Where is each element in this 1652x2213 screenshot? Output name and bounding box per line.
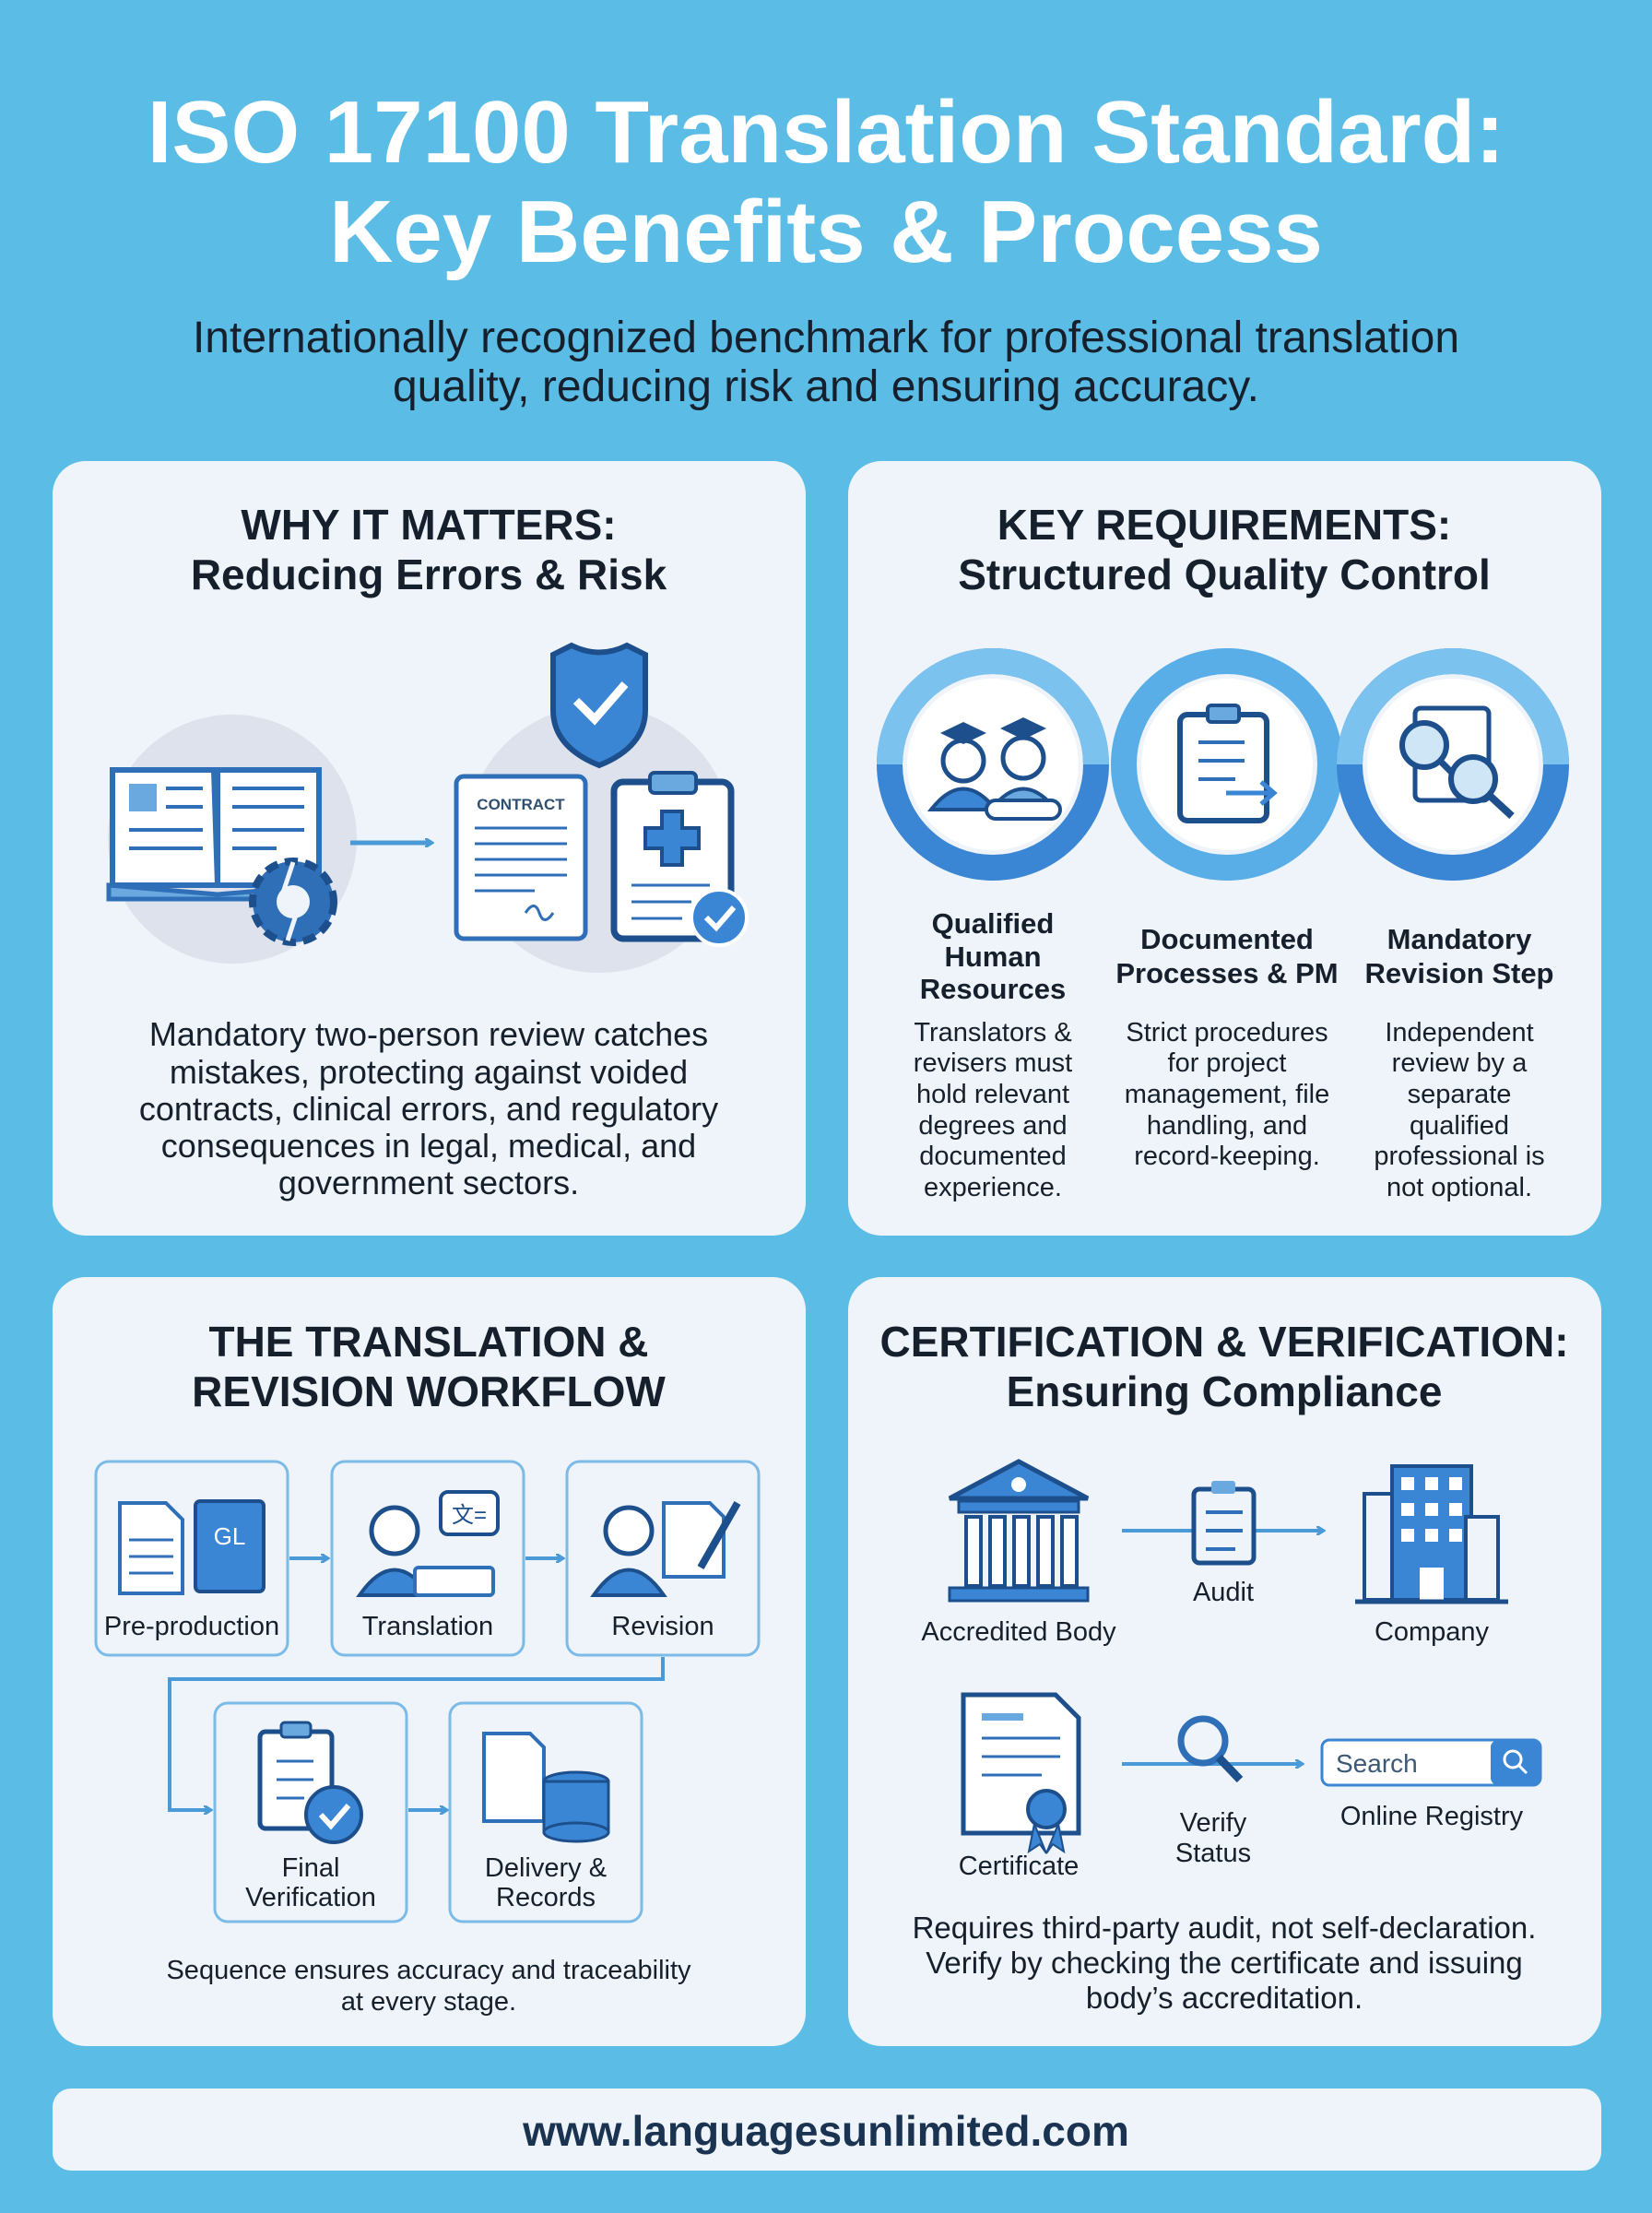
- icon: accredited body: Accredited Body: [921, 1617, 1116, 1647]
- caption: certification: Verify by checking the certificate and issuing: [926, 1946, 1523, 1980]
- heading: certification: Ensuring Compliance: [1007, 1367, 1442, 1415]
- column: mandatory revision: qualified: [1410, 1111, 1509, 1141]
- heading: why it matters: Reducing Errors & Risk: [191, 550, 667, 598]
- step: delivery & records: Delivery &: [485, 1853, 607, 1883]
- caption: certification: body’s accreditation.: [1086, 1981, 1363, 2015]
- heading: workflow: [192, 1318, 666, 1415]
- column: qualified human resources: documented: [919, 1142, 1067, 1171]
- panel: certification: [848, 1277, 1601, 2046]
- panel: key requirements: [848, 461, 1601, 1236]
- icon: docs with magnifier: [1402, 708, 1512, 816]
- icon: magnifier verify: Status: [1175, 1839, 1251, 1868]
- column: mandatory revision: not optional.: [1386, 1173, 1532, 1202]
- heading: key requirements: KEY REQUIREMENTS:: [997, 501, 1451, 549]
- title: [148, 83, 1504, 281]
- column: documented processes: management, file: [1125, 1080, 1329, 1109]
- step: delivery & records: [450, 1703, 642, 1922]
- text: why it matters body: [139, 1015, 718, 1201]
- column: documented processes: for project: [1168, 1048, 1286, 1078]
- search box: online registry: [1322, 1740, 1540, 1831]
- step: final verification: Final: [282, 1853, 339, 1883]
- icon: magnifier verify: Verify: [1180, 1808, 1247, 1838]
- footer: www.languagesunlimited.com: [522, 2107, 1129, 2155]
- column: qualified human resources: revisers must: [914, 1048, 1072, 1078]
- column: mandatory revision: [1364, 923, 1554, 1202]
- column: documented processes: handling, and: [1147, 1111, 1307, 1141]
- icon: book with broken gear: [108, 715, 357, 964]
- heading: workflow: THE TRANSLATION &: [208, 1318, 649, 1366]
- search box: online registry: Search: [1336, 1749, 1418, 1778]
- step: pre-production: GL: [214, 1522, 245, 1550]
- panel: workflow: [53, 1277, 806, 2046]
- column: documented processes: [1115, 923, 1339, 1171]
- caption: certification: Requires third-party audit, not self-declaration.: [913, 1911, 1536, 1945]
- icon: audit: [1193, 1481, 1254, 1607]
- caption: certification: [913, 1911, 1536, 2015]
- step: pre-production: [96, 1462, 288, 1655]
- search box: online registry: Online Registry: [1340, 1802, 1524, 1831]
- step: final verification: Verification: [245, 1883, 376, 1912]
- text: why it matters body: consequences in legal, medical, and: [161, 1127, 696, 1165]
- column: documented processes: record-keeping.: [1134, 1142, 1320, 1171]
- chain of rings: [890, 661, 1556, 868]
- heading: why it matters: WHY IT MATTERS:: [241, 501, 617, 549]
- column: mandatory revision: separate: [1408, 1080, 1511, 1109]
- column: documented processes: Processes & PM: [1115, 957, 1339, 989]
- arrow: verify flow: [1122, 1762, 1302, 1766]
- text: why it matters body: mistakes, protecting against voided: [170, 1053, 688, 1091]
- heading: certification: CERTIFICATION & VERIFICATION:: [879, 1318, 1569, 1366]
- column: qualified human resources: Resources: [920, 973, 1066, 1005]
- column: qualified human resources: degrees and: [918, 1111, 1068, 1141]
- icon: magnifier verify: [1175, 1719, 1251, 1868]
- column: qualified human resources: hold relevant: [916, 1080, 1069, 1109]
- step: revision: [567, 1462, 759, 1655]
- arrows between steps: [170, 1558, 663, 1810]
- step: translation: 文=: [452, 1503, 487, 1528]
- heading: key requirements: [958, 501, 1491, 598]
- column: qualified human resources: [914, 907, 1072, 1202]
- step: pre-production: Pre-production: [104, 1612, 279, 1641]
- step: revision: Revision: [611, 1612, 714, 1641]
- heading: workflow: REVISION WORKFLOW: [192, 1367, 666, 1415]
- column: mandatory revision: Independent: [1385, 1018, 1534, 1047]
- arrow: audit flow: [1122, 1529, 1323, 1533]
- column: qualified human resources: Qualified: [932, 907, 1054, 940]
- column: qualified human resources: Human: [944, 941, 1042, 973]
- icon: company: [1355, 1466, 1508, 1647]
- heading: why it matters: [191, 501, 667, 598]
- title: ISO 17100 Translation Standard:: [148, 83, 1504, 182]
- column: mandatory revision: Revision Step: [1364, 957, 1554, 989]
- arrow: [350, 841, 431, 845]
- step: translation: Translation: [362, 1612, 493, 1641]
- caption: workflow: [166, 1956, 691, 2017]
- column: mandatory revision: professional is: [1374, 1142, 1545, 1171]
- subtitle: [193, 314, 1459, 411]
- icon: certificate: [959, 1695, 1079, 1881]
- heading: certification: [879, 1318, 1569, 1415]
- text: why it matters body: government sectors.: [278, 1164, 579, 1201]
- subtitle: quality, reducing risk and ensuring accuracy.: [393, 362, 1259, 411]
- column: qualified human resources: Translators &: [914, 1018, 1072, 1047]
- column: documented processes: Documented: [1140, 923, 1314, 955]
- caption: workflow: at every stage.: [341, 1987, 516, 2017]
- title: Key Benefits & Process: [329, 183, 1323, 281]
- caption: workflow: Sequence ensures accuracy and traceability: [166, 1956, 691, 1985]
- icon: certificate: Certificate: [959, 1852, 1079, 1881]
- icon: accredited body: [921, 1462, 1116, 1647]
- subtitle: Internationally recognized benchmark for professional translation: [193, 314, 1459, 362]
- text: why it matters body: contracts, clinical errors, and regulatory: [139, 1090, 718, 1128]
- footer: [53, 2089, 1601, 2171]
- icon: contract and medical clipboard with shield: CONTRACT: [477, 796, 565, 813]
- step: translation: [332, 1462, 524, 1655]
- icon: company: Company: [1375, 1617, 1490, 1647]
- column: mandatory revision: Mandatory: [1387, 923, 1532, 955]
- column: documented processes: Strict procedures: [1126, 1018, 1328, 1047]
- icon: clipboard process: [1180, 705, 1274, 821]
- text: why it matters body: Mandatory two-person review catches: [149, 1015, 708, 1053]
- column: qualified human resources: experience.: [924, 1173, 1062, 1202]
- heading: key requirements: Structured Quality Control: [958, 550, 1491, 598]
- icon: audit: Audit: [1193, 1578, 1254, 1607]
- icon: contract and medical clipboard with shield: [456, 645, 747, 973]
- icon: graduates: [931, 717, 1060, 819]
- column: mandatory revision: review by a: [1392, 1048, 1528, 1078]
- panel: why it matters: [53, 461, 806, 1236]
- step: delivery & records: Records: [496, 1883, 596, 1912]
- step: final verification: [215, 1703, 407, 1922]
